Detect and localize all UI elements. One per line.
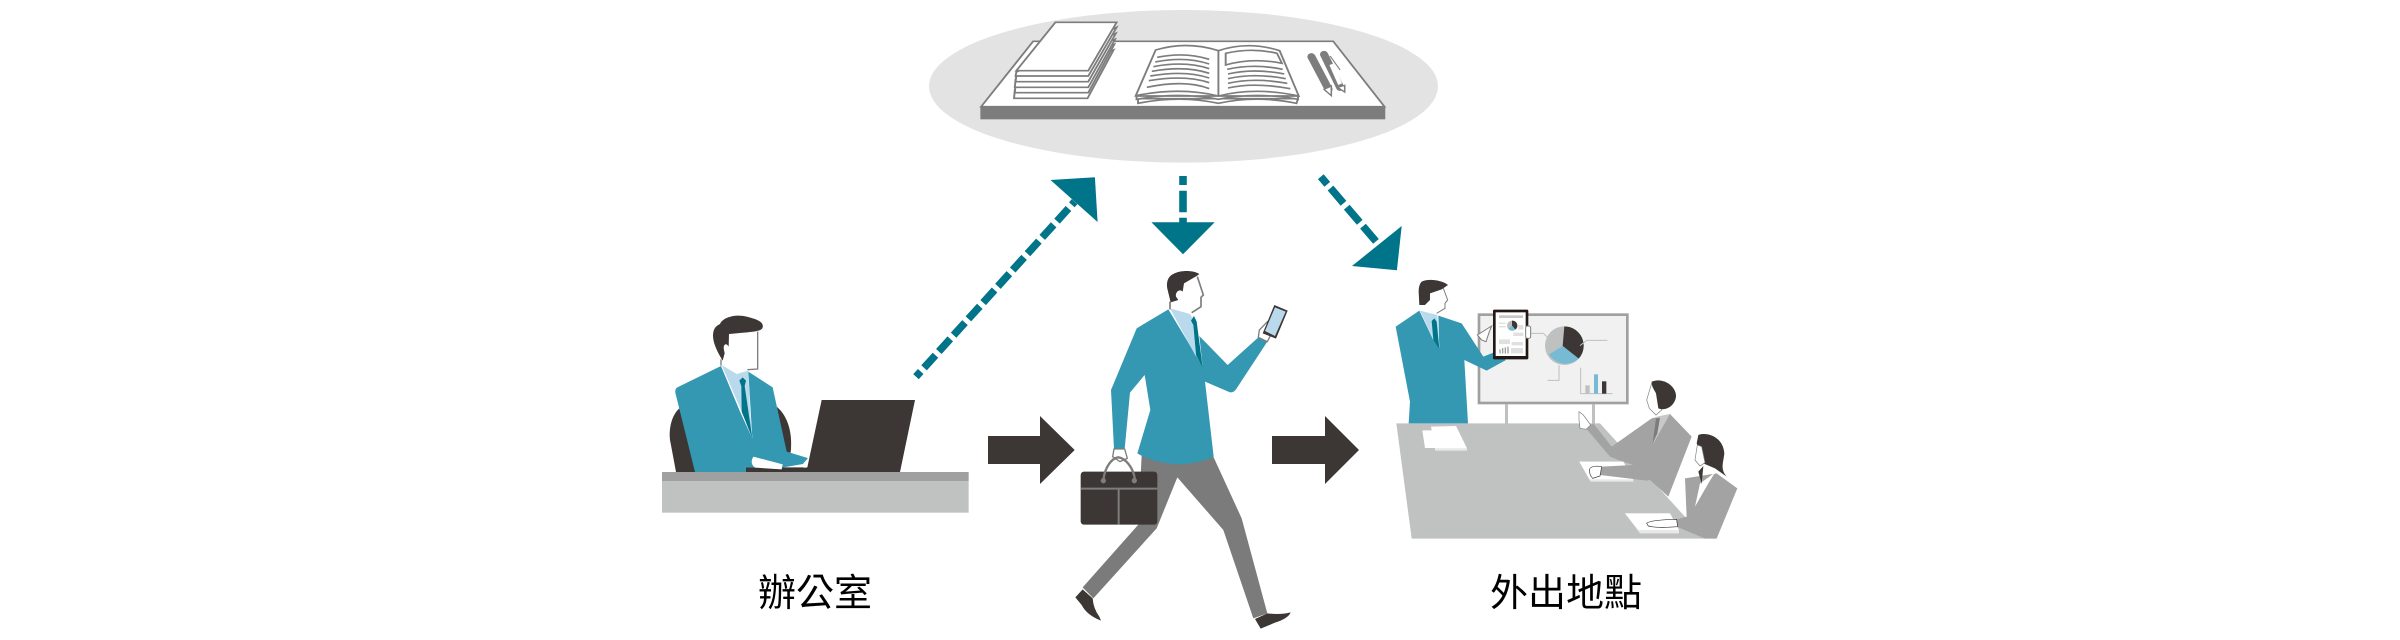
face outline (721, 332, 758, 370)
desk edge (980, 107, 1385, 119)
phone hand (1258, 322, 1272, 342)
face (1695, 445, 1705, 466)
panel: shared documents on a desk (929, 10, 1438, 163)
briefcase hand (1113, 449, 1127, 462)
phone screen (1265, 307, 1286, 336)
presenter (1396, 280, 1506, 423)
hair (1697, 434, 1727, 477)
shirt (722, 365, 752, 437)
pointing hand (1477, 326, 1492, 342)
jacket (675, 366, 808, 472)
meeting scene (1396, 280, 1737, 539)
arrow: office to walking (988, 416, 1075, 484)
hair (1652, 380, 1676, 409)
whiteboard legs (1505, 404, 1595, 424)
face outline (1437, 288, 1448, 313)
shirt (1420, 311, 1439, 347)
chair (670, 407, 791, 472)
tie (1432, 318, 1439, 349)
desk body (662, 481, 969, 513)
tie (739, 377, 752, 438)
hair strand (1698, 466, 1703, 484)
other hand (803, 459, 808, 468)
meeting table (1396, 423, 1705, 539)
collar (1653, 414, 1670, 443)
papers of listeners (1579, 462, 1679, 533)
hand (1647, 519, 1678, 527)
resting hand (1589, 466, 1602, 478)
tie (1191, 316, 1203, 367)
arrow: walking to outside (1272, 416, 1359, 484)
tie (1653, 418, 1660, 443)
listener woman (1647, 434, 1737, 539)
hair (1167, 271, 1199, 302)
walking man with briefcase (1075, 271, 1291, 629)
raised hand (1579, 412, 1591, 429)
jacket (1586, 414, 1692, 497)
head (1647, 383, 1662, 415)
shoes (1075, 589, 1291, 629)
listener man (1579, 380, 1692, 497)
trousers (1083, 455, 1267, 618)
jacket (1111, 309, 1267, 464)
stack of papers (1014, 22, 1117, 98)
laptop (746, 400, 915, 472)
label: outside location: 外出地點 (1490, 573, 1642, 615)
blouse (1695, 473, 1715, 507)
face outline (1170, 277, 1203, 313)
open book (1136, 45, 1299, 103)
arrow: office to documents (916, 177, 1098, 377)
desk top (981, 41, 1384, 107)
pencil and pen (1311, 54, 1345, 96)
arrow: documents to walking man (1151, 176, 1215, 254)
shirt (1170, 308, 1196, 357)
desk and documents (980, 22, 1385, 119)
jacket (1677, 473, 1737, 539)
jacket (1396, 311, 1506, 423)
label: office: 辦公室 (758, 573, 872, 615)
tablet (1493, 310, 1528, 359)
hand (752, 457, 783, 469)
briefcase (1081, 457, 1157, 525)
hair (713, 316, 763, 361)
hair (1419, 280, 1448, 305)
phone (1263, 305, 1288, 339)
thumb hand (1526, 326, 1531, 338)
desk top band (662, 472, 969, 481)
office scene (662, 316, 969, 513)
pie chart (1531, 326, 1607, 380)
papers on table (1422, 426, 1467, 451)
background ellipse (929, 10, 1438, 163)
whiteboard (1479, 315, 1627, 403)
bar chart (1581, 368, 1613, 394)
arrow: documents to outside location (1321, 177, 1402, 270)
